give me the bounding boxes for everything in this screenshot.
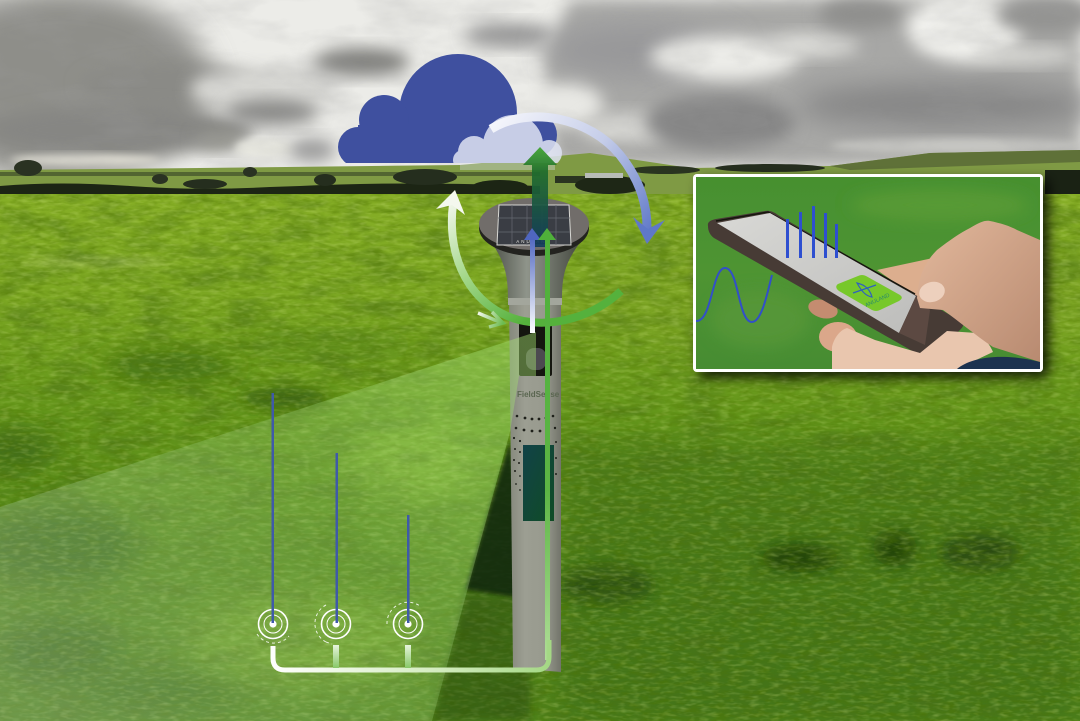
phone body bbox=[708, 211, 963, 354]
internal battery block bbox=[523, 445, 554, 521]
black display panel bbox=[519, 322, 552, 376]
soil sensor 3 bbox=[387, 602, 422, 638]
sky background bbox=[0, 0, 1080, 170]
sensor reading line 1 bbox=[272, 393, 274, 623]
post shadow on grass bbox=[432, 440, 530, 721]
blue storage cloud bbox=[338, 54, 557, 172]
sensor post bbox=[479, 198, 589, 672]
funnel neck bbox=[490, 240, 582, 300]
phone top edge bbox=[716, 212, 915, 294]
right hollows bbox=[760, 544, 840, 572]
signal bars bbox=[786, 206, 838, 258]
right storm clouds bbox=[545, 0, 1080, 165]
sensor reading line 2 bbox=[336, 453, 338, 623]
cloud reflection bbox=[460, 163, 555, 170]
bright upper right band bbox=[550, 220, 1080, 360]
central green upload arrow bbox=[523, 147, 557, 247]
app logo bbox=[836, 275, 902, 311]
left storm clouds bbox=[0, 0, 210, 180]
app logo name: ANULAND bbox=[864, 293, 891, 309]
speaker dots bbox=[513, 415, 557, 491]
finger behind phone bbox=[877, 258, 930, 296]
solar head bbox=[479, 200, 589, 256]
display logo bbox=[526, 348, 546, 370]
cable stub bbox=[333, 645, 339, 668]
inset blurred grass bbox=[696, 177, 1040, 369]
upper hand and thumb bbox=[917, 221, 1040, 362]
app logo glyph bbox=[853, 283, 876, 297]
light cloud bbox=[453, 115, 562, 163]
sensor reading line 3 bbox=[407, 515, 410, 623]
soil sensor 1 bbox=[257, 610, 289, 643]
phone inset panel bbox=[693, 174, 1043, 372]
cable stub bbox=[405, 645, 411, 668]
grass texture bbox=[0, 194, 1080, 721]
solar panel bbox=[497, 205, 571, 245]
screen reflection bbox=[899, 296, 930, 345]
sensor cable bbox=[273, 640, 549, 670]
back fingers bbox=[808, 300, 838, 318]
grass field bbox=[0, 194, 1080, 721]
sleeve bbox=[957, 357, 1040, 369]
green curved upload arrow bbox=[436, 190, 621, 323]
pale meadow flowers bbox=[20, 257, 170, 267]
left hollows bbox=[100, 352, 240, 380]
small intake arrow bbox=[478, 312, 503, 327]
right darker ground tone bbox=[560, 440, 1080, 721]
mid scale grass tussocks bbox=[0, 194, 1080, 721]
lower hand bbox=[832, 328, 993, 369]
blue signal arrow in post bbox=[524, 228, 541, 333]
brand on solar panel: ANULAND bbox=[516, 239, 552, 244]
light beam from sensors to post bbox=[0, 332, 536, 721]
blue curved download arrow bbox=[491, 117, 665, 244]
cloud mottling bbox=[168, 0, 1003, 168]
central cumulus bbox=[190, 66, 334, 114]
post body bbox=[509, 295, 561, 672]
signal wave bbox=[696, 268, 772, 322]
post brand: FieldSense bbox=[517, 390, 560, 399]
distant hills and treeline bbox=[0, 150, 1080, 200]
soil sensor 2 bbox=[315, 605, 350, 644]
thumbnail bbox=[919, 282, 945, 302]
green power line and arrow bbox=[538, 228, 556, 660]
phone screen bbox=[717, 213, 916, 333]
